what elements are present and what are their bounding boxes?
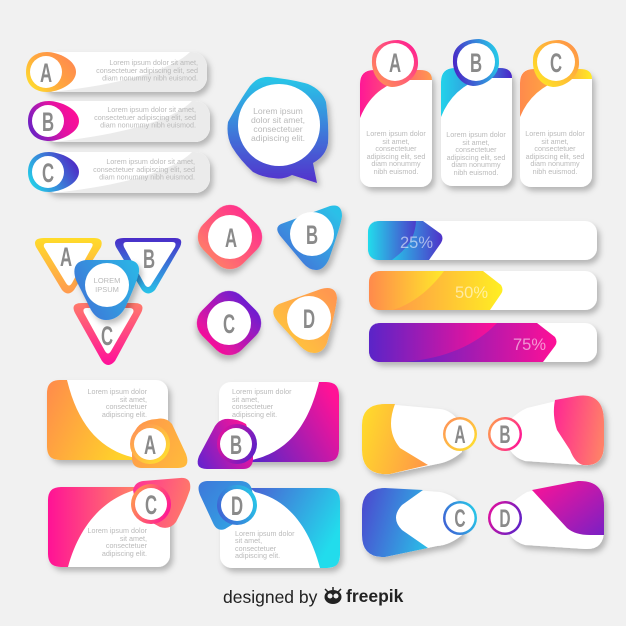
badge A [190, 197, 270, 277]
corner card A: sit amet, [120, 395, 147, 404]
card C: C [550, 48, 562, 78]
progress bar 25%: 25% [400, 234, 433, 252]
triangle A: A [60, 242, 72, 272]
progress bar 75% [369, 323, 597, 362]
corner card D: sit amet, [235, 536, 262, 545]
panel: progress bars [368, 221, 597, 362]
card C: nibh euismod. [533, 167, 577, 176]
panel: triangles cluster [35, 238, 181, 365]
corner card C: Lorem ipsum dolor [87, 526, 148, 535]
banner A: consectetuer adipiscing elit, sed [96, 66, 198, 75]
panel: labelled banners [26, 52, 210, 193]
banner C: Lorem ipsum dolor sit amet, [106, 157, 195, 166]
credit: designed by freepik [223, 586, 404, 607]
card C: sit amet, [541, 137, 569, 146]
triangle C: C [101, 321, 113, 351]
corner card A [47, 380, 187, 468]
banner A: Lorem ipsum dolor sit amet, [109, 58, 198, 67]
corner card A: Lorem ipsum dolor [87, 387, 148, 396]
corner card B: Lorem ipsum dolor [232, 387, 292, 396]
progress bar 50% [369, 271, 597, 310]
tag C: C [454, 505, 466, 533]
banner C: consectetuer adipiscing elit, sed [93, 165, 195, 174]
corner card A: A [144, 430, 156, 460]
card B: consectetuer [455, 145, 497, 154]
badge C [189, 283, 269, 363]
card B: diam nonummy [451, 160, 501, 169]
panel: tabbed cards [360, 39, 592, 187]
speech bubble: adipiscing elit. [251, 133, 305, 143]
speech bubble: dolor sit amet, [251, 115, 305, 125]
badge B: B [306, 220, 318, 250]
corner card A: consectetuer [106, 402, 148, 411]
corner card D: Lorem ipsum dolor [235, 529, 295, 538]
card C: consectetuer [534, 144, 576, 153]
speech bubble [228, 77, 328, 183]
triangle A [35, 238, 102, 294]
tag D: D [499, 505, 511, 533]
corner card B: adipiscing elit. [232, 410, 277, 419]
card B: B [470, 48, 482, 78]
corner card D: D [231, 491, 243, 521]
card A: nibh euismod. [374, 167, 418, 176]
credit: designed by freepik: freepik [346, 586, 404, 606]
triangle C [74, 303, 142, 365]
banner A [26, 52, 207, 92]
corner card D [199, 481, 340, 568]
tag D [488, 481, 604, 549]
corner card C: adipiscing elit. [102, 549, 147, 558]
triangle B [115, 238, 181, 294]
speech bubble: Lorem ipsum [253, 106, 303, 116]
panel: corner cards [47, 380, 340, 568]
card A [360, 40, 432, 187]
card A: consectetuer [375, 144, 417, 153]
corner card B: consectetuer [232, 402, 274, 411]
banner A: A [40, 58, 52, 88]
centre badge [74, 260, 139, 320]
card A: Lorem ipsum dolor [366, 129, 426, 138]
banner C [28, 152, 210, 193]
centre badge: IPSUM [95, 285, 119, 294]
tag B [488, 396, 604, 465]
corner card B: B [230, 430, 242, 460]
banner C: C [42, 158, 54, 188]
tag A [362, 404, 477, 474]
banner A: diam nonummy nibh euismod. [102, 74, 198, 82]
badge A: A [225, 223, 237, 253]
card A: diam nonummy [371, 159, 421, 168]
corner card D: consectetuer [235, 544, 277, 553]
banner B [28, 101, 210, 142]
banner B: Lorem ipsum dolor sit amet, [107, 105, 196, 114]
card A: sit amet, [382, 137, 410, 146]
badge D: D [303, 304, 315, 334]
progress bar 50%: 50% [455, 284, 488, 302]
card A: adipiscing elit, sed [367, 152, 425, 161]
corner card A: adipiscing elit. [102, 410, 147, 419]
card C: Lorem ipsum dolor [525, 129, 585, 138]
centre badge: LOREM [94, 276, 120, 285]
panel: ABCD badges [189, 197, 342, 363]
banner B: consectetuer adipiscing elit, sed [94, 113, 196, 122]
credit: designed by freepik: designed by [223, 587, 318, 607]
card B: Lorem ipsum dolor [446, 130, 506, 139]
banner B: diam nonummy nibh euismod. [100, 120, 196, 130]
progress bar 25% [368, 221, 597, 260]
corner card C: consectetuer [106, 541, 148, 550]
progress bar 75%: 75% [513, 336, 546, 354]
speech bubble: consectetuer [253, 124, 303, 134]
card B: sit amet, [462, 138, 490, 147]
card C: diam nonummy [530, 159, 580, 168]
card C: adipiscing elit, sed [526, 152, 584, 161]
card A: A [389, 48, 401, 78]
banner C: diam nonummy nibh euismod. [99, 172, 195, 182]
tag A: A [454, 421, 466, 449]
panel: connector tags [362, 396, 604, 557]
card B: adipiscing elit, sed [447, 153, 505, 162]
card B [441, 39, 512, 186]
corner card D: adipiscing elit. [235, 551, 280, 560]
corner card B: sit amet, [232, 395, 259, 404]
banner B: B [42, 107, 54, 137]
corner card C: C [145, 490, 157, 520]
badge D [273, 288, 337, 353]
corner card C: sit amet, [120, 534, 147, 543]
card C [520, 40, 592, 187]
tag C [362, 488, 477, 557]
badge B [277, 205, 342, 270]
corner card C [48, 478, 190, 567]
badge C: C [223, 309, 235, 339]
triangle B: B [143, 244, 155, 274]
corner card B [198, 382, 339, 469]
card B: nibh euismod. [454, 168, 498, 177]
tag B: B [499, 421, 511, 449]
icon: freepik bee logo [324, 587, 342, 604]
